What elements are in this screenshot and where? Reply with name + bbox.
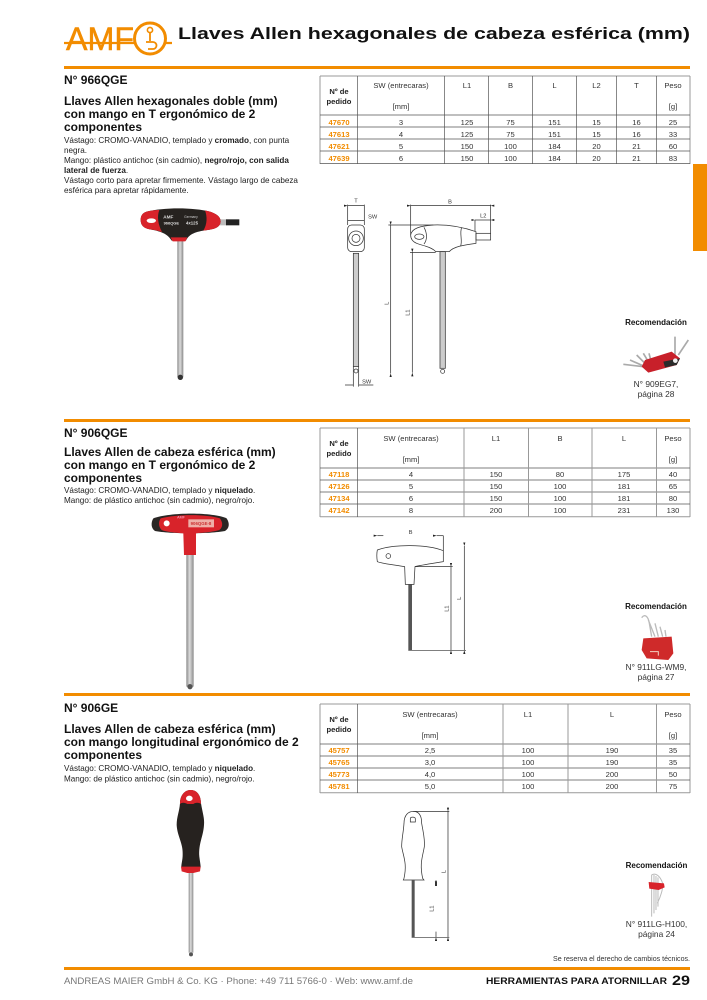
recommendation: 911LG-H100: Recomendación [626, 861, 688, 870]
table 906QGE: 65 [669, 482, 677, 491]
heading 966QGE [64, 94, 278, 134]
description 906GE [64, 764, 255, 784]
table 906QGE: 181 [618, 482, 630, 491]
table 906QGE: 100 [554, 494, 566, 503]
recommendation: 909EG7: Recomendación [625, 318, 687, 327]
table 966QGE: 16 [632, 130, 641, 139]
table 906QGE: 231 [618, 506, 630, 515]
heading 966QGE: con mango en T ergonómico de 2 [64, 107, 256, 121]
table 906QGE: 6 [409, 494, 413, 503]
table 906QGE: [g] [669, 455, 677, 464]
heading 906GE [64, 722, 299, 762]
technical drawing 966QGE: T [354, 199, 358, 205]
photo: T-handle key 966QGE [141, 208, 239, 380]
table 966QGE: B [508, 81, 513, 90]
table 966QGE: 47670 [328, 118, 350, 127]
table 966QGE: 5 [399, 142, 403, 151]
table 906GE: 100 [522, 758, 534, 767]
table 906GE: L1 [524, 710, 532, 719]
table 906QGE: 47134 [328, 494, 350, 503]
table 906GE: [mm] [422, 731, 438, 740]
table 966QGE: pedido [327, 97, 352, 106]
recommendation: 911LG-H100 [626, 861, 688, 939]
table 906QGE: 150 [490, 494, 502, 503]
recommendation: 911LG-H100: N° 911LG-H100, [626, 919, 687, 929]
panel: N° 906QGE [64, 426, 276, 689]
table 906QGE: 181 [618, 494, 630, 503]
table 966QGE [320, 76, 690, 164]
description 966QGE: Vástago: CROMO-VANADIO, templado y cromado, con punta [64, 136, 290, 145]
recommendation: 909EG7: N° 909EG7, [634, 379, 678, 389]
table 906GE: 45781 [328, 782, 350, 791]
description 966QGE: Vástago corto para apretar firmemente. Vástago largo de cabeza [64, 176, 298, 185]
heading 906QGE [64, 445, 276, 485]
recommendation: 911LG-WM9: N° 911LG-WM9, [626, 662, 686, 672]
table 906QGE: Peso [664, 434, 682, 443]
heading 906QGE: Llaves Allen de cabeza esférica (mm) [64, 445, 276, 459]
table 966QGE: 100 [504, 154, 517, 163]
table 966QGE: 184 [548, 142, 561, 151]
heading 906GE: con mango longitudinal ergonómico de 2 [64, 735, 299, 749]
recommendation: 909EG7: página 28 [638, 389, 675, 399]
panel: N° 906GE [64, 701, 299, 956]
technical drawing 966QGE: SW [362, 380, 372, 386]
photo: screwdriver-handle key 906GE [177, 790, 204, 956]
table 906QGE: pedido [327, 449, 352, 458]
product number 906GE: N° 906GE [64, 701, 118, 715]
table 906QGE: [mm] [403, 455, 419, 464]
heading 906QGE: con mango en T ergonómico de 2 [64, 458, 256, 472]
table 906GE: 190 [606, 746, 618, 755]
table 966QGE: 20 [592, 142, 601, 151]
table 906GE: 3,0 [425, 758, 435, 767]
description 966QGE [64, 136, 298, 195]
table 906QGE: 40 [669, 470, 677, 479]
table 966QGE: 15 [592, 118, 601, 127]
icon: folding key set [623, 337, 688, 373]
table 906GE: 200 [606, 770, 618, 779]
table 966QGE: 151 [548, 130, 561, 139]
table 906GE: 5,0 [425, 782, 435, 791]
table 906GE: L [610, 710, 614, 719]
table 906GE: 100 [522, 770, 534, 779]
table 906QGE: 175 [618, 470, 630, 479]
table 966QGE: 3 [399, 118, 403, 127]
table 966QGE: [g] [669, 102, 677, 111]
description 966QGE: Mango: plástico antichoc (sin cadmio), negro/rojo, con salida [64, 156, 289, 165]
table 906QGE: 150 [490, 470, 502, 479]
table 906GE: 45773 [328, 770, 350, 779]
table 906GE: 190 [606, 758, 618, 767]
heading 906GE: Llaves Allen de cabeza esférica (mm) [64, 722, 276, 736]
table 966QGE: [mm] [393, 102, 409, 111]
photo: T-handle key 906QGE [152, 514, 229, 689]
table 906QGE: 200 [490, 506, 502, 515]
table 906QGE: Nº de [329, 439, 349, 448]
technical drawing 966QGE: L2 [480, 213, 486, 219]
table 906QGE: 8 [409, 506, 413, 515]
table 966QGE: SW (entrecaras) [373, 81, 429, 90]
technical drawing 966QGE: B [448, 199, 452, 205]
table 966QGE: T [634, 81, 639, 90]
table 906GE [320, 704, 690, 793]
table 906QGE: 47142 [328, 506, 350, 515]
table 966QGE: 150 [461, 142, 473, 151]
table 966QGE: 150 [461, 154, 473, 163]
table 966QGE: 184 [548, 154, 561, 163]
table 966QGE: L1 [463, 81, 471, 90]
technical drawing 906GE: L1 [429, 906, 435, 912]
heading 906GE: componentes [64, 748, 142, 762]
description 906QGE: Mango: de plástico antichoc (sin cadmio), negro/rojo. [64, 496, 255, 505]
photo: T-handle key 966QGE: AMF [163, 215, 174, 220]
table 966QGE: 60 [669, 142, 677, 151]
table 906GE: [g] [669, 731, 677, 740]
table 906QGE: 47118 [329, 470, 349, 479]
heading 906QGE: componentes [64, 471, 142, 485]
technical drawing 966QGE: L1 [405, 310, 411, 316]
table 966QGE: 125 [461, 118, 473, 127]
photo: T-handle key 906QGE: 906QGE-8 [191, 521, 212, 526]
table 906QGE: B [557, 434, 563, 443]
table 966QGE: Nº de [329, 87, 349, 96]
photo: T-handle key 906QGE: AMF [177, 516, 186, 520]
technical drawing 966QGE [345, 199, 491, 387]
description 966QGE: lateral de fuerza. [64, 166, 128, 175]
table 966QGE: 47613 [328, 130, 350, 139]
side tab [693, 164, 707, 251]
recommendation: 911LG-H100: página 24 [638, 929, 675, 939]
description 966QGE: negra. [64, 146, 87, 155]
photo: T-handle key 966QGE: 966QGE [164, 221, 179, 226]
table 906QGE: 80 [556, 470, 564, 479]
table 906QGE: 5 [409, 482, 413, 491]
header [64, 21, 690, 57]
table 906QGE: 80 [669, 494, 677, 503]
table 966QGE: 4 [399, 130, 403, 139]
table 906QGE: L [622, 434, 626, 443]
table 906GE: 50 [669, 770, 677, 779]
table 966QGE: 75 [506, 130, 515, 139]
table 966QGE: L2 [592, 81, 601, 90]
table 906QGE: 130 [667, 506, 679, 515]
recommendation: 909EG7 [623, 318, 688, 399]
footer section title: HERRAMIENTAS PARA ATORNILLAR [486, 976, 668, 986]
table 906GE: 200 [606, 782, 618, 791]
icon: L-key set with red clip [649, 874, 665, 917]
technical drawing 906GE [402, 811, 449, 937]
logo: AMF: AMF [66, 21, 134, 57]
heading 966QGE: Llaves Allen hexagonales doble (mm) [64, 94, 278, 108]
footer contact line: ANDREAS MAIER GmbH & Co. KG · Phone: +49 711 5766-0 · Web: www.amf.de [64, 976, 413, 986]
table 906GE: Nº de [329, 715, 349, 724]
table 906GE: pedido [327, 725, 352, 734]
table 966QGE: 21 [632, 154, 641, 163]
technical drawing 906QGE: L [457, 597, 463, 600]
technical drawing 906QGE [377, 530, 466, 650]
table 966QGE: 125 [461, 130, 473, 139]
recommendation: 911LG-WM9 [625, 602, 687, 682]
logo: AMF [64, 21, 172, 57]
photo: T-handle key 966QGE: Germany [184, 215, 198, 219]
description 966QGE: esférica para apretar rápidamente. [64, 186, 189, 195]
table 906QGE: L1 [492, 434, 500, 443]
table 906GE: Peso [664, 710, 682, 719]
technical drawing 906QGE: B [409, 530, 413, 536]
table 906QGE: 100 [554, 482, 566, 491]
heading 966QGE: componentes [64, 120, 142, 134]
table 966QGE: 21 [632, 142, 641, 151]
table 906GE: 35 [669, 746, 677, 755]
description 906GE: Vástago: CROMO-VANADIO, templado y niquelado. [64, 764, 255, 773]
recommendation: 911LG-WM9: página 27 [638, 672, 675, 682]
description 906QGE [64, 486, 255, 505]
table 906QGE: 100 [554, 506, 566, 515]
recommendation: 911LG-WM9: Recomendación [625, 602, 687, 611]
table 966QGE: 83 [669, 154, 677, 163]
table 906GE: SW (entrecaras) [402, 710, 458, 719]
table 966QGE: 75 [506, 118, 515, 127]
table 966QGE: 20 [592, 154, 601, 163]
table 906GE: 100 [522, 746, 534, 755]
table 966QGE: 15 [592, 130, 601, 139]
table 966QGE: 6 [399, 154, 403, 163]
page number: 29 [672, 973, 690, 988]
table 966QGE: 47621 [328, 142, 350, 151]
table 966QGE: 100 [504, 142, 517, 151]
table 966QGE: 25 [669, 118, 677, 127]
photo: T-handle key 966QGE: 4x125 [186, 221, 199, 226]
title: Llaves Allen hexagonales de cabeza esférica (mm) [178, 24, 690, 43]
table 906GE: 75 [669, 782, 677, 791]
product number 966QGE: N° 966QGE [64, 73, 128, 87]
icon: key set in red holder [642, 616, 673, 660]
table 906QGE: 150 [490, 482, 502, 491]
table 966QGE: 151 [548, 118, 561, 127]
technical drawing 906GE: L [441, 870, 447, 873]
table 966QGE: Peso [664, 81, 682, 90]
technical drawing 906QGE: L1 [444, 606, 450, 612]
table 906GE: 45765 [328, 758, 350, 767]
technical drawing 966QGE: L [384, 302, 390, 305]
table 906GE: 35 [669, 758, 677, 767]
table 966QGE: L [552, 81, 557, 90]
table 906GE: 45757 [328, 746, 350, 755]
table 966QGE: 47639 [328, 154, 350, 163]
table 906GE: 2,5 [425, 746, 435, 755]
note: technical changes: Se reserva el derecho de cambios técnicos. [553, 954, 690, 963]
table 906QGE: 47126 [328, 482, 350, 491]
table 906GE: 100 [522, 782, 534, 791]
table 966QGE: 33 [669, 130, 677, 139]
description 906GE: Mango: de plástico antichoc (sin cadmio), negro/rojo. [64, 774, 255, 784]
table 906QGE [320, 428, 690, 517]
footer [64, 973, 690, 988]
table 906GE: 4,0 [425, 770, 435, 779]
technical drawing 966QGE: SW [368, 214, 378, 220]
table 906QGE: SW (entrecaras) [383, 434, 439, 443]
product number 906QGE: N° 906QGE [64, 426, 128, 440]
table 906QGE: 4 [409, 470, 413, 479]
table 966QGE: 16 [632, 118, 641, 127]
description 906QGE: Vástago: CROMO-VANADIO, templado y niquelado. [64, 486, 255, 495]
panel: N° 966QGE [64, 73, 298, 380]
